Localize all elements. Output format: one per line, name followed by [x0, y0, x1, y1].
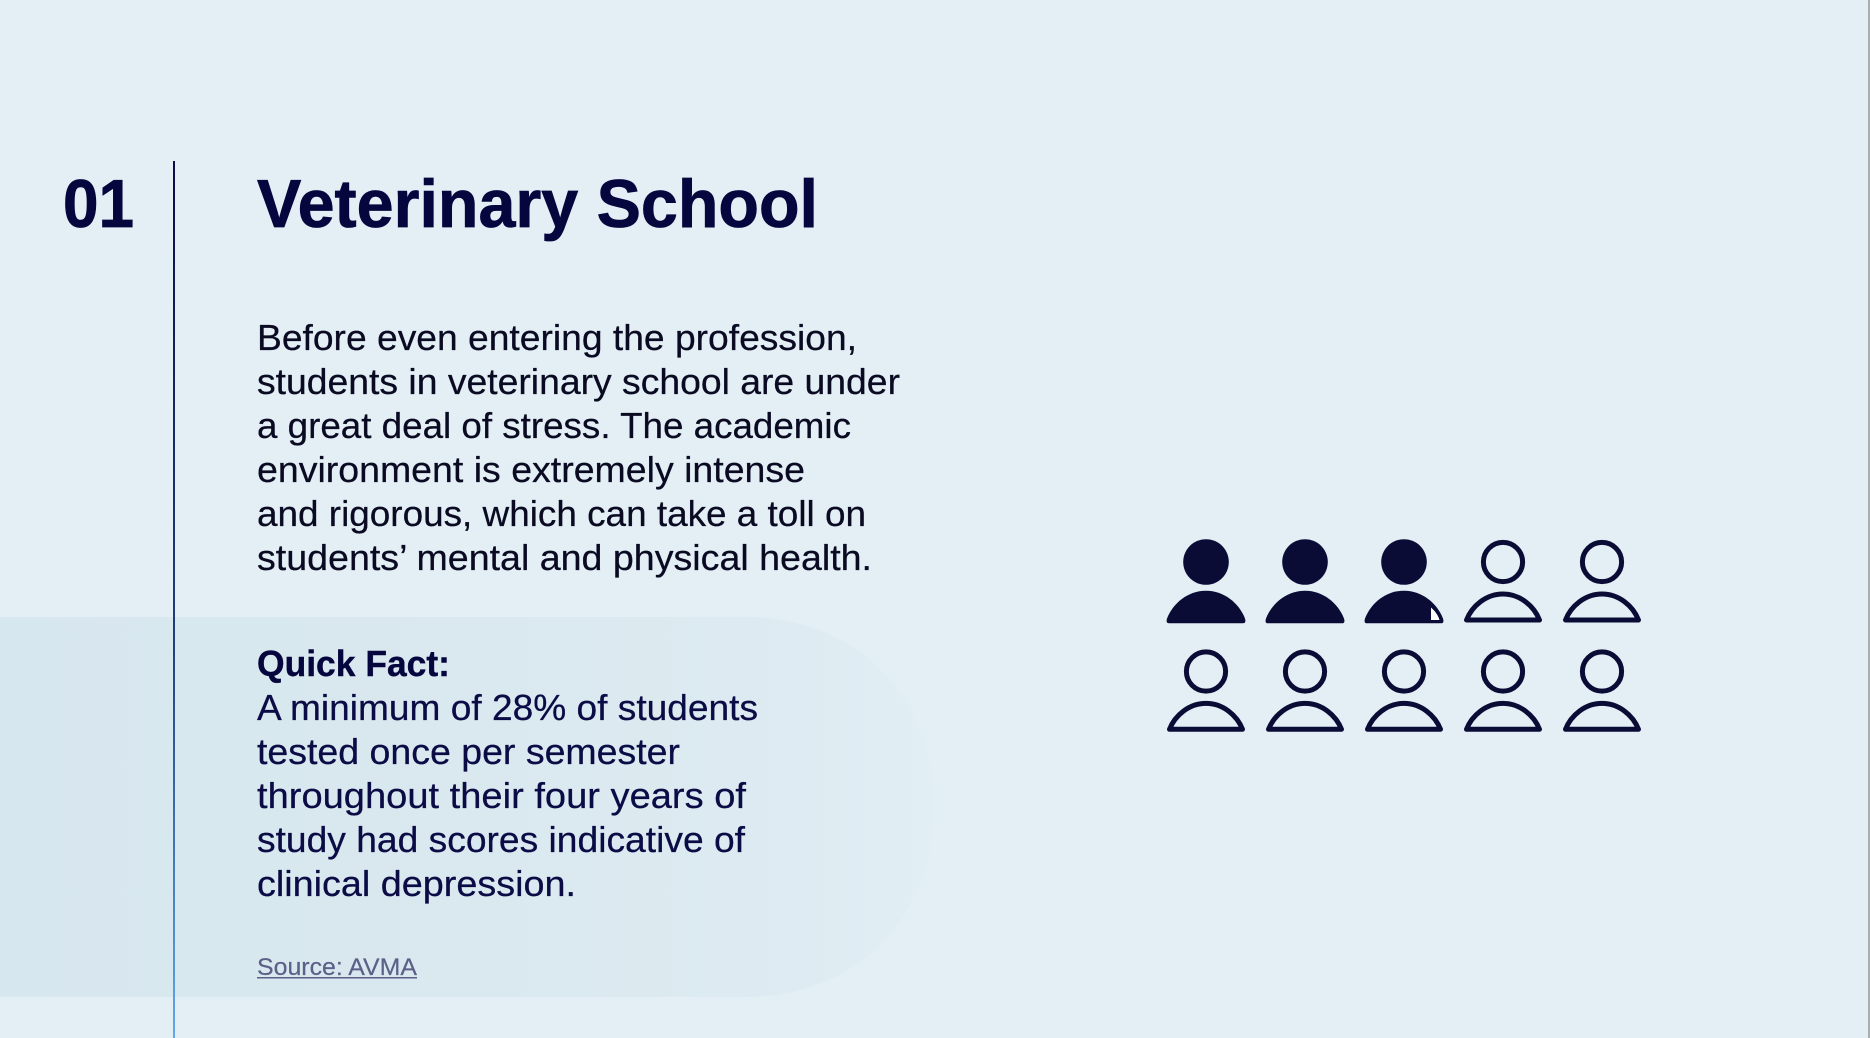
icon: filled person 1 [1167, 539, 1245, 623]
icon: filled person 2 [1266, 539, 1344, 623]
text block: introduction: students in veterinary school are under [257, 361, 900, 402]
icon: outline person 7 [1268, 652, 1342, 729]
text block: quick fact: clinical depression. [257, 863, 576, 904]
icon: mostly filled person 3 [1365, 539, 1443, 623]
text block: quick fact: throughout their four years of [257, 775, 747, 816]
text block: introduction: a great deal of stress. The academic [257, 405, 851, 446]
icon: outline person 10 [1566, 652, 1638, 729]
text block: quick fact: tested once per semester [257, 731, 680, 772]
panel: quick fact band [0, 617, 934, 997]
text block: introduction: and rigorous, which can take a toll on [257, 493, 866, 534]
pictogram: 28% of students [1167, 539, 1638, 729]
text block: introduction [257, 317, 900, 578]
text block: quick fact [257, 687, 758, 904]
icon: outline person 9 [1466, 652, 1540, 729]
quick fact heading: Quick Fact: [257, 643, 450, 684]
right edge line [1868, 0, 1870, 1038]
text block: introduction: students’ mental and physical health. [257, 537, 872, 578]
icon: outline person 6 [1170, 652, 1242, 729]
icon: outline person 5 [1566, 542, 1638, 620]
vertical timeline rule [173, 161, 175, 1038]
text block: introduction: Before even entering the profession, [257, 317, 857, 358]
text block: quick fact: study had scores indicative of [257, 819, 746, 860]
source link: Source: AVMA [257, 954, 417, 981]
icon: outline person 8 [1368, 652, 1440, 729]
icon: outline person 4 [1466, 542, 1540, 620]
title: Veterinary School [257, 166, 818, 242]
text block: quick fact: A minimum of 28% of students [257, 687, 758, 728]
text block: introduction: environment is extremely intense [257, 449, 805, 490]
section number: 01 [63, 166, 134, 242]
